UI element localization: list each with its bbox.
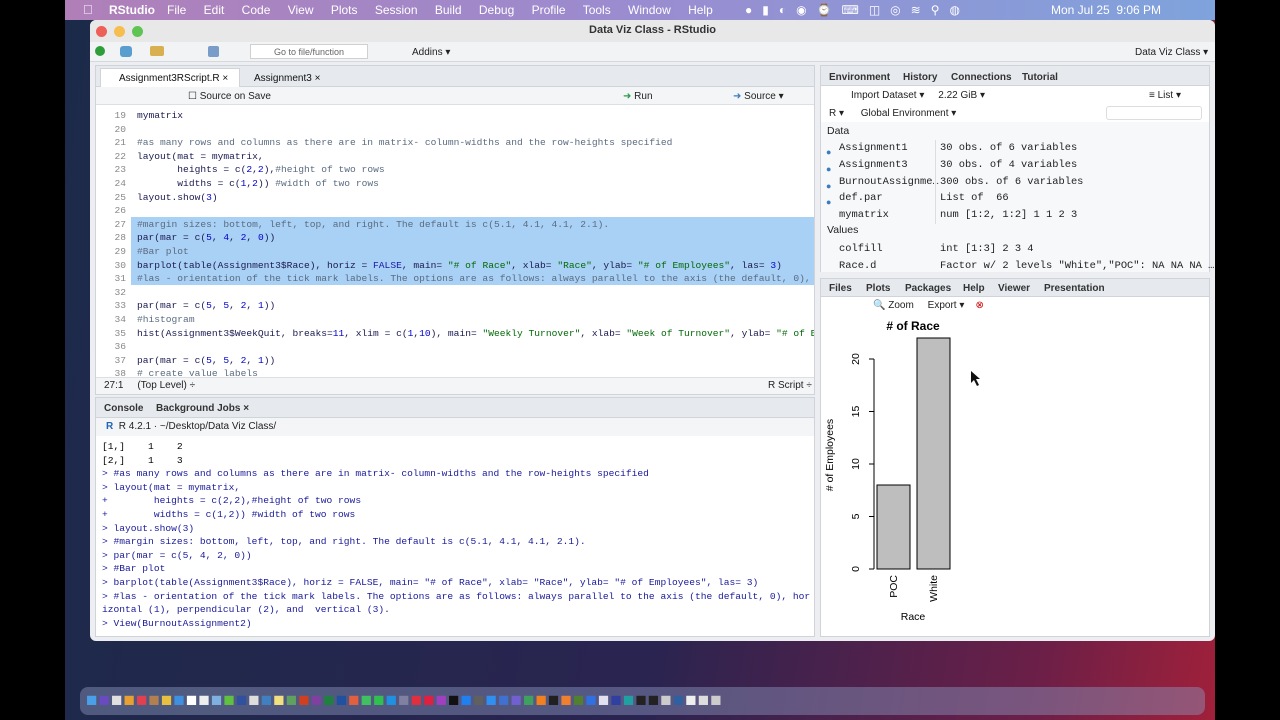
plots pane: [820, 278, 1210, 637]
environment pane: ●: [826, 197, 831, 207]
environment pane: Values: [827, 224, 858, 236]
menu bar: : [83, 2, 93, 17]
environment pane: colfill Race.d: [839, 243, 883, 272]
editor pane: Assignment3RScript.R ×: [119, 73, 228, 84]
editor pane: 27:1 (Top Level) ÷: [104, 380, 195, 391]
console pane: Console: [104, 403, 143, 414]
bar chart: [824, 319, 980, 623]
main toolbar: [90, 42, 1215, 62]
editor pane: Assignment3 ×: [254, 73, 320, 84]
editor pane: ➜ Source ▾: [733, 91, 784, 102]
editor pane: ☐ Source on Save: [188, 91, 271, 102]
environment pane: ●: [826, 181, 831, 191]
console pane: [1,] 1 2 [2,] 1 3 > #as many rows and columns as there are in matrix- column-widths and the row-heights specified > layout(mat = mymatrix, + heights = c(2,2),#height of two rows + widths = c(1,2)) #width of two rows > layout.show(3) > #margin sizes: bottom, left, top, and right. The default is c(5.1, 4.1, 4.1, 2.1). > par(mar = c(5, 4, 2, 0)) > #Bar plot > barplot(table(Assignment3$Race), horiz = FALSE, main= "# of Race", xlab= "Race", ylab= "# of Employees", las= 3) > #las - orientation of the tick mark labels. The options are as follows: always parallel to the axis (the default, 0), hor izontal (1), perpendicular (2), and vertical (3). > View(BurnoutAssignment2): [102, 441, 810, 629]
title bar: Data Viz Class - RStudio: [589, 24, 716, 36]
environment pane: Connections: [951, 72, 1012, 83]
bar chart: 10: [850, 458, 862, 470]
environment pane: R ▾ Global Environment ▾: [829, 108, 956, 119]
environment pane: Data: [827, 125, 849, 137]
environment pane: Import Dataset ▾ 2.22 GiB ▾: [851, 90, 985, 101]
environment pane: ≡ List ▾: [1149, 90, 1181, 101]
bars: [877, 485, 910, 569]
environment pane: int [1:3] 2 3 4 Factor w/ 2 levels "White","POC": NA NA NA …: [940, 243, 1214, 272]
main toolbar: Go to file/function: [274, 47, 344, 57]
bar chart: # of Employees: [824, 419, 836, 491]
menu bar: Mon Jul 25 9:06 PM: [1051, 3, 1161, 17]
console pane: R R 4.2.1 · ~/Desktop/Data Viz Class/: [106, 421, 276, 432]
plots pane: Packages: [905, 283, 951, 294]
dock: ■■■■■■■■■■■■■■■■■■■■■■■■■■■■■■■■■■■■■■■■■■■■■■■■■■■: [86, 690, 723, 711]
bar chart: 15: [850, 406, 862, 417]
console pane: Background Jobs ×: [156, 403, 249, 414]
menu bar: [65, 0, 1215, 20]
editor pane: [95, 65, 815, 395]
plots pane: 🔍 Zoom Export ▾ ⊗: [873, 300, 984, 311]
editor pane: ➜ Run: [623, 91, 653, 102]
environment pane: Assignment1 Assignment3 BurnoutAssignme… def.par mymatrix: [839, 142, 939, 221]
bar chart: 20: [850, 353, 862, 365]
editor pane: R Script ÷: [768, 380, 812, 391]
plots pane: Presentation: [1044, 283, 1105, 294]
environment pane: Environment: [829, 72, 890, 83]
dock: [80, 687, 1205, 715]
chart title: # of Race: [886, 319, 940, 333]
bar chart: White: [928, 575, 940, 602]
environment pane: ●: [826, 147, 831, 157]
plots pane: Files: [829, 283, 852, 294]
bar chart: POC: [888, 575, 900, 598]
menu bar: File Edit Code View Plots Session Build Debug Profile Tools Window Help: [167, 3, 713, 17]
menu bar: ●▮◐◉⌚⌨◫◎≋⚲◍: [745, 3, 970, 17]
bar chart: Race: [901, 611, 925, 623]
environment pane: 30 obs. of 6 variables 30 obs. of 4 variables 300 obs. of 6 variables List of 66 num [1:2, 1:2] 1 1 2 3: [940, 142, 1083, 221]
environment pane: History: [903, 72, 937, 83]
RStudio window: [90, 20, 1215, 641]
menu bar: RStudio: [109, 3, 155, 17]
bar chart: 5: [850, 513, 862, 519]
environment pane: ●: [826, 164, 831, 174]
environment pane: Tutorial: [1022, 72, 1058, 83]
main toolbar: Addins ▾: [412, 47, 450, 58]
title bar: [90, 20, 1215, 42]
plots pane: Viewer: [998, 283, 1030, 294]
bar chart: 0: [850, 566, 862, 572]
code lines: 19 20 21 22 23 24 25 26 27 28 29 30 31 32 33 34 35 36 37 38: [114, 110, 126, 376]
main toolbar: Data Viz Class ▾: [1135, 47, 1208, 58]
environment pane: [820, 65, 1210, 272]
plots pane: Plots: [866, 283, 890, 294]
plots pane: Help: [963, 283, 985, 294]
